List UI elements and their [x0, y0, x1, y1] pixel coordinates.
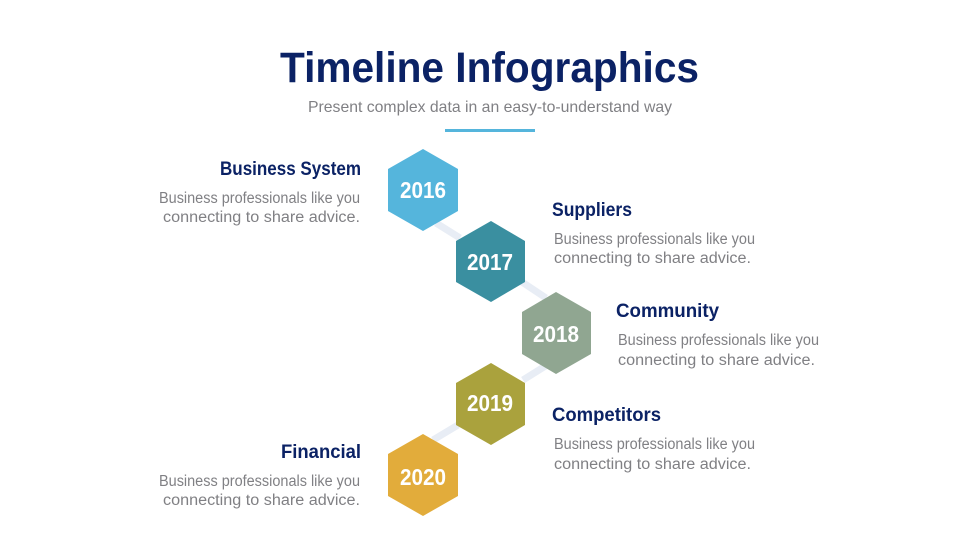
text block: Competitors: Business professionals like you — [554, 436, 755, 453]
text block: Suppliers: connecting to share advice. — [554, 250, 751, 267]
text block: Financial — [159, 442, 361, 509]
milestone 2020 hexagon — [388, 434, 458, 516]
text block: Community — [616, 301, 819, 369]
text block: Business System: Business System — [220, 159, 361, 180]
text block: Competitors: connecting to share advice. — [554, 456, 751, 473]
milestone 2019 hexagon: 2019 — [467, 390, 513, 416]
milestone 2016 hexagon — [388, 149, 458, 231]
text block: Suppliers: Suppliers — [552, 200, 632, 221]
text block: Business System — [159, 159, 361, 226]
text block: Community: connecting to share advice. — [618, 352, 815, 369]
milestone 2017 hexagon: 2017 — [467, 249, 513, 275]
milestone 2018 hexagon — [522, 292, 591, 374]
text block: Financial: Financial — [281, 442, 361, 463]
text block: Business System: connecting to share advice. — [163, 209, 360, 226]
title: Timeline Infographics — [280, 44, 699, 92]
subtitle: Present complex data in an easy-to-understand way — [308, 99, 672, 116]
timeline connectors — [433, 223, 547, 440]
text block: Financial: connecting to share advice. — [163, 492, 360, 509]
text block: Competitors — [552, 405, 755, 473]
milestone 2018 hexagon: 2018 — [533, 321, 579, 347]
milestone 2019 hexagon — [456, 363, 525, 445]
milestone 2020 hexagon: 2020 — [400, 464, 446, 490]
text block: Community: Community — [616, 301, 719, 322]
milestone 2016 hexagon: 2016 — [400, 177, 446, 203]
text block: Suppliers: Business professionals like you — [554, 231, 755, 248]
title underline — [445, 129, 535, 132]
text block: Financial: Business professionals like you — [159, 473, 360, 490]
text block: Suppliers — [552, 200, 755, 267]
text block: Business System: Business professionals like you — [159, 190, 360, 207]
text block: Community: Business professionals like you — [618, 332, 819, 349]
text block: Competitors: Competitors — [552, 405, 661, 426]
milestone 2017 hexagon — [456, 221, 525, 302]
